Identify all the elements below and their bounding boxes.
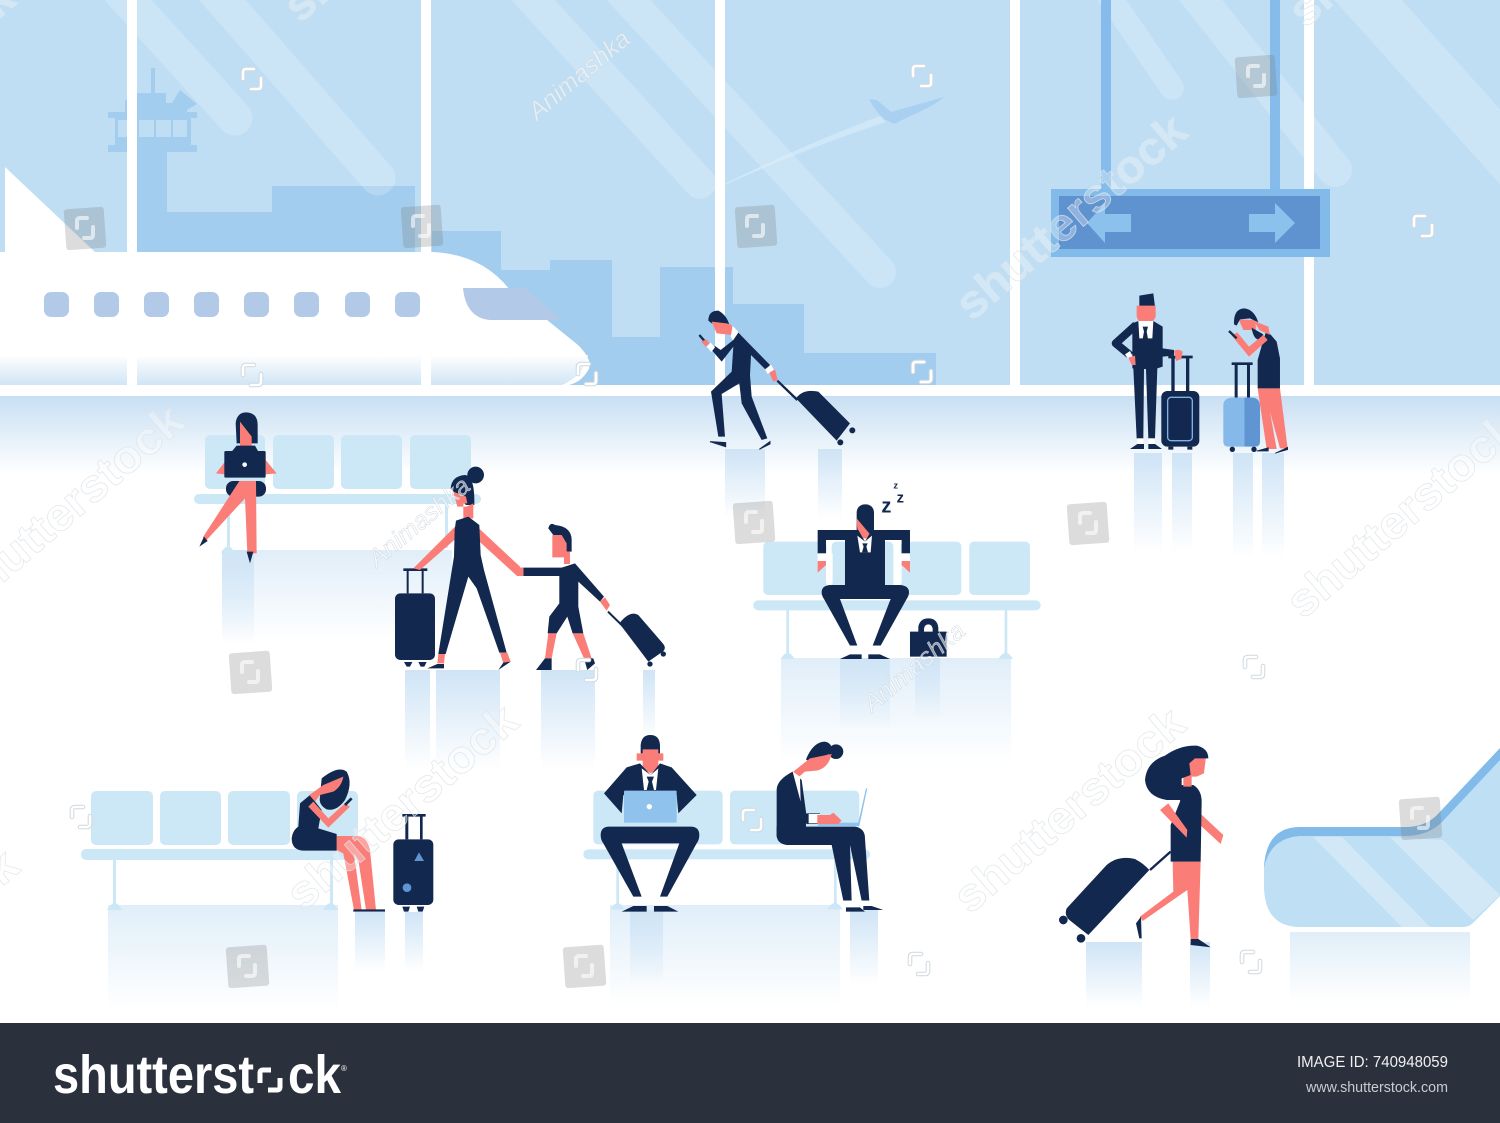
suitcase [1223, 398, 1244, 447]
front arm [1160, 803, 1187, 838]
shoes [1136, 917, 1211, 947]
tower cab panes [118, 120, 187, 137]
bench: bottom centre [583, 791, 870, 909]
collar [731, 326, 738, 343]
sticker circle [403, 883, 411, 892]
suitcase [395, 593, 435, 660]
person: woman with laptop on bench [199, 412, 277, 563]
jacket [777, 772, 806, 837]
watermark: small logo marks outline [72, 66, 1432, 974]
arm [308, 802, 350, 828]
arms [413, 519, 523, 575]
escalator glare [1313, 837, 1500, 927]
dress [1171, 785, 1202, 862]
cuffs [818, 553, 910, 561]
head [857, 504, 874, 538]
watermark: shutterstock text: shutterstock [943, 696, 1195, 923]
contrail [696, 116, 886, 198]
phone [345, 798, 352, 805]
body and legs [438, 517, 507, 654]
suitcase handle [608, 612, 623, 627]
shoes [622, 906, 678, 912]
suitcase handle [1150, 852, 1171, 870]
shoes [199, 537, 253, 563]
hands [817, 813, 842, 824]
head [637, 749, 663, 773]
watermark: shutterstock text: shutterstock [276, 693, 528, 920]
hands [818, 561, 910, 573]
dress [1258, 330, 1280, 388]
person: businessman pulling suitcase [699, 311, 855, 449]
shoes [846, 906, 883, 912]
direction sign [1051, 0, 1330, 257]
shirt and tie [857, 536, 872, 552]
face [857, 518, 871, 538]
face and neck [453, 492, 473, 518]
window glare bands [110, 0, 1500, 272]
watermark: contributor name: Animashka [856, 617, 971, 719]
sticker triangle [414, 852, 424, 861]
legs [203, 481, 257, 553]
footer logo mark [260, 1070, 280, 1090]
bag [910, 618, 947, 657]
snoring z's [881, 481, 904, 517]
window frames [0, 0, 1500, 396]
cuffs [707, 343, 774, 374]
rear arm [1198, 812, 1223, 844]
parked airplane [0, 167, 590, 386]
shoes [427, 662, 511, 670]
thighs [226, 481, 266, 497]
suitcase [619, 614, 665, 662]
hands [515, 567, 610, 611]
escalator handrail [1264, 748, 1500, 868]
hair and bun [829, 744, 843, 759]
person: woman walking with suitcase [1059, 746, 1223, 947]
image id: IMAGE ID: 740948059 [1297, 1054, 1448, 1071]
face [1239, 319, 1256, 330]
torso [232, 446, 258, 452]
person: man with laptop side view [777, 742, 883, 912]
cabin windows [44, 292, 420, 317]
suit [818, 530, 910, 587]
hands [701, 339, 778, 382]
forearm and cuff [800, 813, 820, 824]
suit [1132, 321, 1174, 438]
suitcase [1161, 391, 1199, 447]
ankles [437, 653, 511, 663]
hair [320, 769, 350, 810]
cuff [1125, 351, 1133, 359]
footer logo: ck [288, 1045, 342, 1105]
phone [699, 335, 705, 342]
legs [545, 633, 592, 658]
person: mother with suitcase [395, 467, 523, 670]
footer logo: shutterst [53, 1045, 254, 1105]
shoes [1257, 447, 1288, 453]
hair [1145, 746, 1208, 800]
face and neck [712, 322, 733, 335]
neck [1254, 321, 1270, 335]
shoes [353, 909, 385, 912]
body and skirt [292, 795, 337, 851]
legs [777, 827, 869, 901]
suitcase handle [777, 381, 797, 400]
distant plane body [869, 97, 944, 124]
window sky [0, 0, 1500, 386]
shirt [793, 772, 801, 802]
face and neck [552, 535, 570, 564]
white sleeves [826, 553, 902, 583]
floor reflections [108, 449, 1470, 1010]
suitcase handle [1232, 362, 1253, 398]
person: businessman standing with suitcase [1116, 293, 1199, 450]
hair [708, 311, 729, 325]
laptop [818, 788, 867, 826]
watermark: contributor name [361, 25, 971, 719]
hair [1234, 308, 1263, 340]
body and arms [523, 563, 604, 633]
watermark: contributor name: Animashka [521, 25, 636, 127]
person: sleeping man [818, 481, 947, 659]
bench: centre [753, 542, 1041, 659]
sign arrows [1249, 203, 1295, 243]
registered mark: ® [341, 1064, 347, 1073]
legs [1258, 388, 1288, 449]
cockpit window [463, 288, 562, 320]
snoring z's: z [897, 490, 904, 506]
socks [850, 646, 881, 653]
hands [1128, 350, 1183, 365]
hair [236, 412, 258, 443]
face [309, 777, 343, 802]
hair and bun [467, 467, 484, 483]
neck and face [1183, 757, 1206, 787]
escalator [1264, 748, 1500, 927]
plane belly fade [0, 355, 588, 386]
hair [641, 735, 660, 753]
arm [1232, 332, 1268, 357]
watermark: shutterstock text: shutterstock [945, 103, 1197, 330]
laptop [224, 451, 266, 478]
phone [1229, 331, 1237, 338]
face [1137, 306, 1156, 323]
shirt and tie [642, 768, 658, 790]
legs [1140, 862, 1201, 939]
legs [822, 585, 909, 646]
socks [843, 901, 869, 907]
legs [601, 827, 699, 897]
hair [1139, 293, 1155, 307]
floor shadow gradient [0, 396, 1500, 474]
face [240, 422, 252, 447]
suitcase: navy with stickers [393, 814, 433, 912]
suit jacket, arms and legs [711, 333, 770, 440]
suitcase [796, 391, 850, 441]
person: woman on phone with blue suitcase [1223, 308, 1288, 453]
snoring z's: z [893, 481, 898, 491]
bench: bottom left [81, 791, 361, 910]
snoring z's: z [881, 495, 891, 517]
footer bar [0, 1023, 1500, 1123]
shoes [710, 442, 770, 449]
shoes [536, 658, 595, 670]
watermark: stamp logos [77, 66, 1428, 976]
person: woman on phone seated [292, 769, 385, 912]
watermark: small logo marks fill [72, 66, 1432, 974]
shirt and tie [1138, 321, 1153, 338]
distant airplane [696, 97, 944, 198]
bench: top left [194, 435, 481, 553]
face and neck [793, 754, 832, 777]
shoes [840, 654, 890, 659]
watermark: grey stamps [64, 55, 1442, 988]
person: man with laptop front view [601, 735, 699, 912]
person: child with suitcase [515, 524, 666, 670]
socks and shoes [1137, 438, 1155, 444]
jacket [604, 763, 697, 813]
suitcase handle [1168, 356, 1193, 391]
arms [216, 460, 277, 474]
watermark: contributor name: Animashka [361, 472, 476, 574]
suitcase [1066, 858, 1149, 935]
bent arm [1116, 325, 1136, 356]
legs [337, 836, 376, 910]
laptop [624, 791, 677, 823]
control tower and skyline [108, 68, 936, 386]
hair [548, 524, 572, 552]
website: www.shutterstock.com [1305, 1080, 1448, 1096]
